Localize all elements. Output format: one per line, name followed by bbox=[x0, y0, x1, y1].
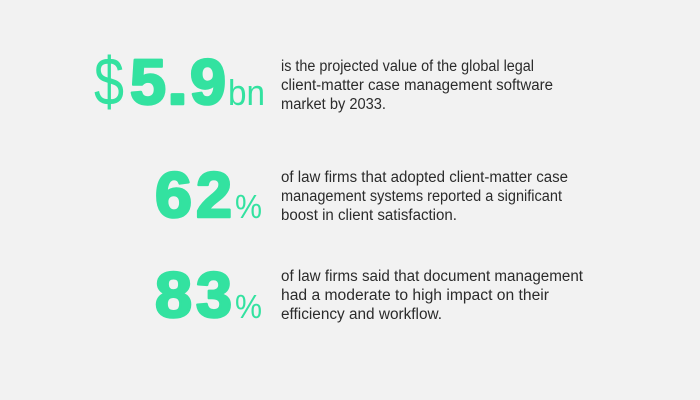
figure 62: 6 bbox=[155, 159, 192, 231]
stat: 83% bbox=[155, 259, 262, 331]
text: efficiency description: efficiency and workflow. bbox=[281, 306, 442, 323]
figure 5.9: 9 bbox=[190, 46, 226, 118]
unit bn: bn bbox=[228, 72, 265, 113]
unit percent: % bbox=[235, 288, 262, 325]
text: client satisfaction description: boost in client satisfaction. bbox=[281, 207, 457, 224]
figure 62: 2 bbox=[196, 159, 232, 231]
figure 5.9: 5 bbox=[130, 46, 166, 118]
text: efficiency description: of law firms said that document management bbox=[281, 268, 584, 285]
text: client satisfaction description: of law firms that adopted client-matter case bbox=[281, 169, 568, 186]
figure 83: 3 bbox=[196, 259, 232, 331]
text: market value description: market by 2033. bbox=[281, 96, 386, 113]
stat: $5.9bn market value bbox=[94, 44, 265, 120]
figure 83: 8 bbox=[155, 259, 192, 331]
dollar sign: $ bbox=[94, 44, 124, 120]
text: client satisfaction description: management systems reported a significant bbox=[281, 188, 563, 205]
stat: 62% bbox=[155, 159, 262, 231]
text: efficiency description: had a moderate to high impact on their bbox=[281, 287, 549, 304]
unit percent: % bbox=[235, 188, 262, 225]
text: market value description: client-matter case management software bbox=[281, 77, 553, 94]
figure 5.9: . bbox=[167, 46, 188, 118]
text: market value description: is the projected value of the global legal bbox=[281, 58, 534, 75]
